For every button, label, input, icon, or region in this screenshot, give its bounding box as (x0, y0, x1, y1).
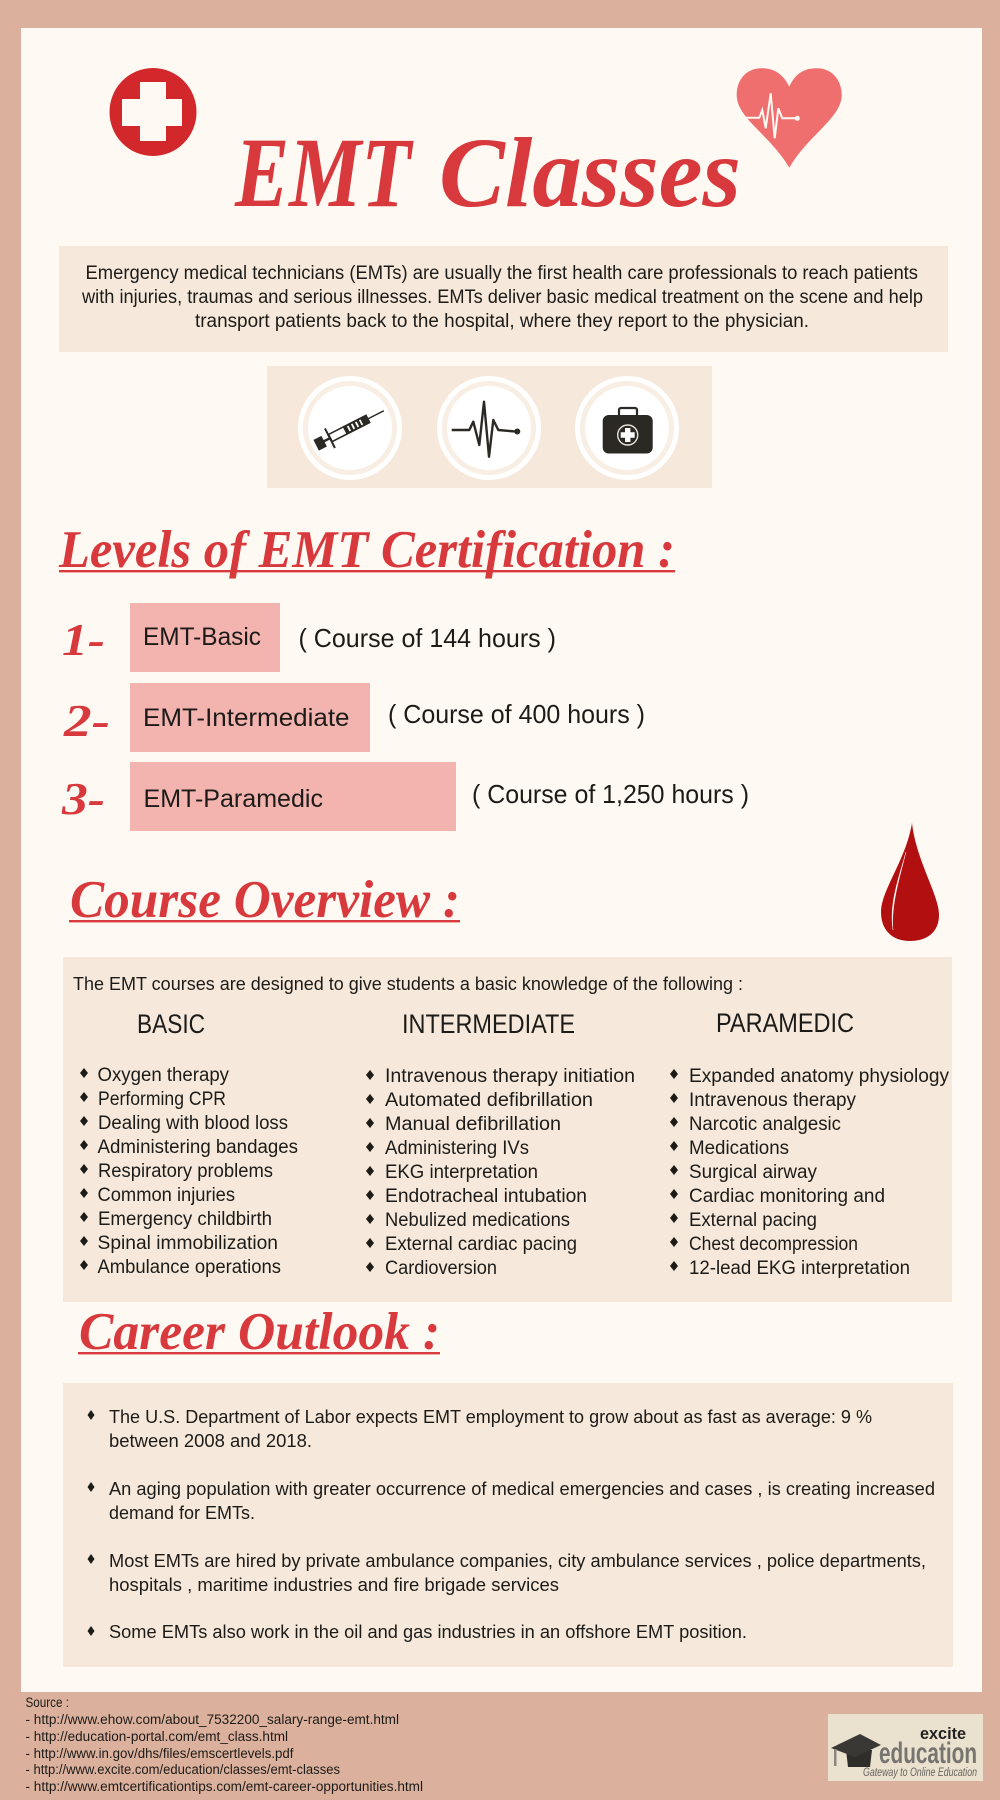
level 1 row: ( Course of 144 hours ) (298, 623, 556, 653)
icon: medical kit (575, 376, 679, 480)
column: intermediate: Administering IVs (385, 1138, 529, 1159)
panel: career outlook (63, 1383, 953, 1667)
column: paramedic: Medications (689, 1138, 789, 1159)
icon: heart with pulse (737, 68, 842, 168)
level 2 row: 2- (63, 695, 110, 746)
source list: Source : (26, 1695, 69, 1710)
level 2 row (63, 683, 645, 752)
column: intermediate: Manual defibrillation (385, 1114, 561, 1135)
column: basic: Oxygen therapy (98, 1065, 229, 1086)
column: intermediate: Endotracheal intubation (385, 1186, 587, 1207)
column: paramedic: Surgical airway (689, 1162, 817, 1183)
column: intermediate: Intravenous therapy initiation (385, 1066, 635, 1087)
panel: introduction (59, 246, 948, 352)
column: basic: Dealing with blood loss (98, 1113, 288, 1134)
icon: blood drop (881, 823, 939, 941)
source list: - http://education-portal.com/emt_class.html (26, 1729, 288, 1744)
column: intermediate: Nebulized medications (385, 1210, 570, 1231)
icon: heartbeat (437, 376, 541, 480)
panel: introduction: transport patients back to the hospital, where they report to the physician. (195, 311, 809, 332)
level 3 row: EMT-Paramedic (144, 785, 323, 813)
icon: graduation cap (831, 1734, 881, 1767)
panel: medical icons (267, 366, 712, 488)
panel: introduction: with injuries, traumas and serious illnesses. EMTs deliver basic medical treatment on the scene and help (81, 287, 923, 308)
course intro text: The EMT courses are designed to give students a basic knowledge of the following : (73, 973, 743, 994)
source list (26, 1695, 423, 1794)
column: intermediate: INTERMEDIATE (402, 1009, 575, 1039)
column: paramedic: Expanded anatomy physiology (689, 1066, 949, 1087)
level 1 row: 1- (62, 614, 105, 665)
column: basic (80, 1009, 298, 1278)
column: basic: Ambulance operations (98, 1257, 281, 1278)
level 2 row: EMT-Intermediate (143, 704, 350, 732)
column: paramedic: 12-lead EKG interpretation (689, 1258, 910, 1279)
career point 1: The U.S. Department of Labor expects EMT employment to grow about as fast as average: 9 % (109, 1406, 872, 1427)
column: basic: Administering bandages (98, 1137, 298, 1158)
level 1 row: EMT-Basic (143, 623, 261, 651)
heading: course overview: Course Overview : (70, 871, 460, 929)
column: basic: Emergency childbirth (98, 1209, 272, 1230)
column: basic: Respiratory problems (98, 1161, 273, 1182)
heading: levels of certification: Levels of EMT Certification : (58, 521, 675, 579)
career point 3: hospitals , maritime industries and fire brigade services (109, 1574, 559, 1595)
column: intermediate (366, 1009, 635, 1279)
career point 2 (88, 1478, 935, 1523)
source list: - http://www.ehow.com/about_7532200_salary-range-emt.html (26, 1712, 399, 1727)
career point 1: between 2008 and 2018. (109, 1430, 312, 1451)
column: intermediate: Cardioversion (385, 1258, 497, 1279)
level 3 row (61, 762, 749, 831)
level 2 row: ( Course of 400 hours ) (388, 699, 645, 729)
heading: career outlook: Career Outlook : (79, 1303, 440, 1361)
level 3 row: 3- (61, 773, 105, 824)
column: intermediate: EKG interpretation (385, 1162, 538, 1183)
title: Classes (439, 117, 741, 228)
source list: - http://www.emtcertificationtips.com/emt-career-opportunities.html (26, 1779, 423, 1794)
column: basic: Performing CPR (98, 1089, 226, 1110)
column: intermediate: Automated defibrillation (385, 1090, 593, 1111)
column: intermediate: External cardiac pacing (385, 1234, 577, 1255)
title (234, 117, 741, 228)
column: basic: Common injuries (98, 1185, 235, 1206)
column: paramedic: PARAMEDIC (716, 1008, 854, 1038)
career point 3: Most EMTs are hired by private ambulance companies, city ambulance services , police departments, (109, 1550, 926, 1571)
column: paramedic: External pacing (689, 1210, 817, 1231)
panel: course overview (63, 957, 952, 1302)
column: paramedic (670, 1008, 949, 1279)
column: paramedic: Intravenous therapy (689, 1090, 856, 1111)
column: basic: Spinal immobilization (98, 1233, 278, 1254)
icon: red cross (110, 68, 196, 156)
logo: excite education (828, 1714, 983, 1781)
career point 4: Some EMTs also work in the oil and gas industries in an offshore EMT position. (109, 1621, 747, 1642)
career point 3 (88, 1550, 926, 1595)
icon: syringe (298, 376, 402, 480)
title: EMT (234, 117, 414, 228)
logo: excite education: excite (920, 1724, 966, 1743)
career point 2: demand for EMTs. (109, 1502, 255, 1523)
source list: - http://www.in.gov/dhs/files/emscertlevels.pdf (26, 1746, 294, 1761)
column: paramedic: Narcotic analgesic (689, 1114, 841, 1135)
column: basic: BASIC (137, 1009, 205, 1039)
source list: - http://www.excite.com/education/classes/emt-classes (26, 1762, 340, 1777)
level 3 row: ( Course of 1,250 hours ) (472, 779, 749, 809)
level 1 row (62, 603, 556, 672)
panel: introduction: Emergency medical technicians (EMTs) are usually the first health care professionals to reach patients (86, 263, 918, 284)
column: paramedic: Chest decompression (689, 1234, 858, 1255)
career point 1 (88, 1406, 872, 1451)
career point 2: An aging population with greater occurrence of medical emergencies and cases , is creating increased (109, 1478, 935, 1499)
column: paramedic: Cardiac monitoring and (689, 1186, 885, 1207)
